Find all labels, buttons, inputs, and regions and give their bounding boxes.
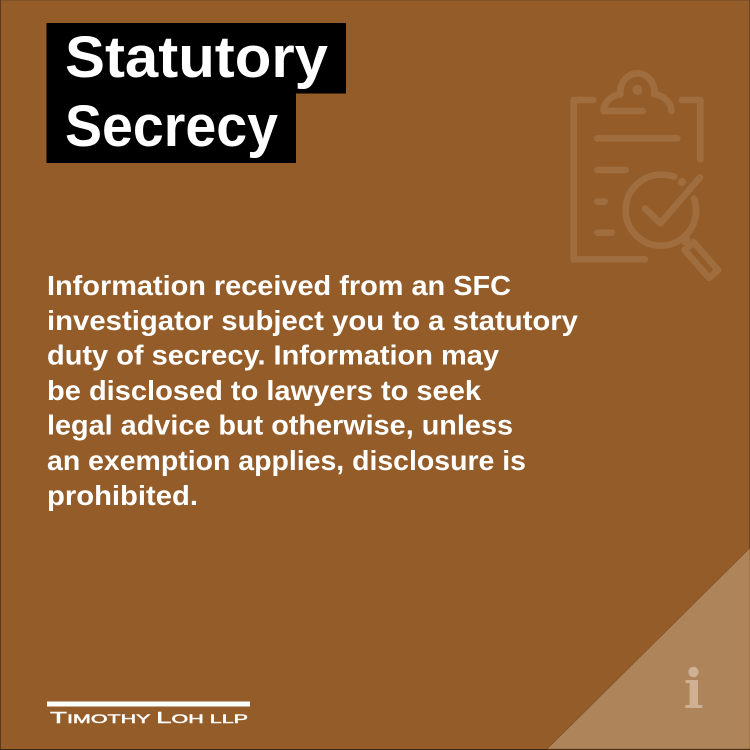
body text: investigator subject you to a statutory: [47, 305, 579, 336]
icon: info letter i: [685, 667, 702, 708]
body text: duty of secrecy. Information may: [47, 340, 500, 370]
body text: an exemption applies, disclosure is: [47, 445, 526, 476]
title: [46, 23, 346, 163]
icon: clipboard with magnifier and check mark: [574, 73, 718, 278]
logo wordmark: T IMOTHY L OH LLP: [50, 710, 248, 727]
body text: be disclosed to lawyers to seek: [47, 375, 482, 406]
title line 2: Secrecy: [65, 94, 278, 159]
title box line 2: [46, 93, 296, 163]
body text: prohibited.: [47, 480, 198, 511]
title box line 1: [46, 23, 346, 94]
logo rule: [47, 702, 250, 706]
title line 1: Statutory: [65, 25, 328, 90]
body text: [47, 270, 579, 511]
corner triangle: [547, 548, 750, 749]
footer logo: [47, 702, 250, 727]
body text: legal advice but otherwise, unless: [47, 410, 513, 440]
body text: Information received from an SFC: [47, 270, 511, 301]
